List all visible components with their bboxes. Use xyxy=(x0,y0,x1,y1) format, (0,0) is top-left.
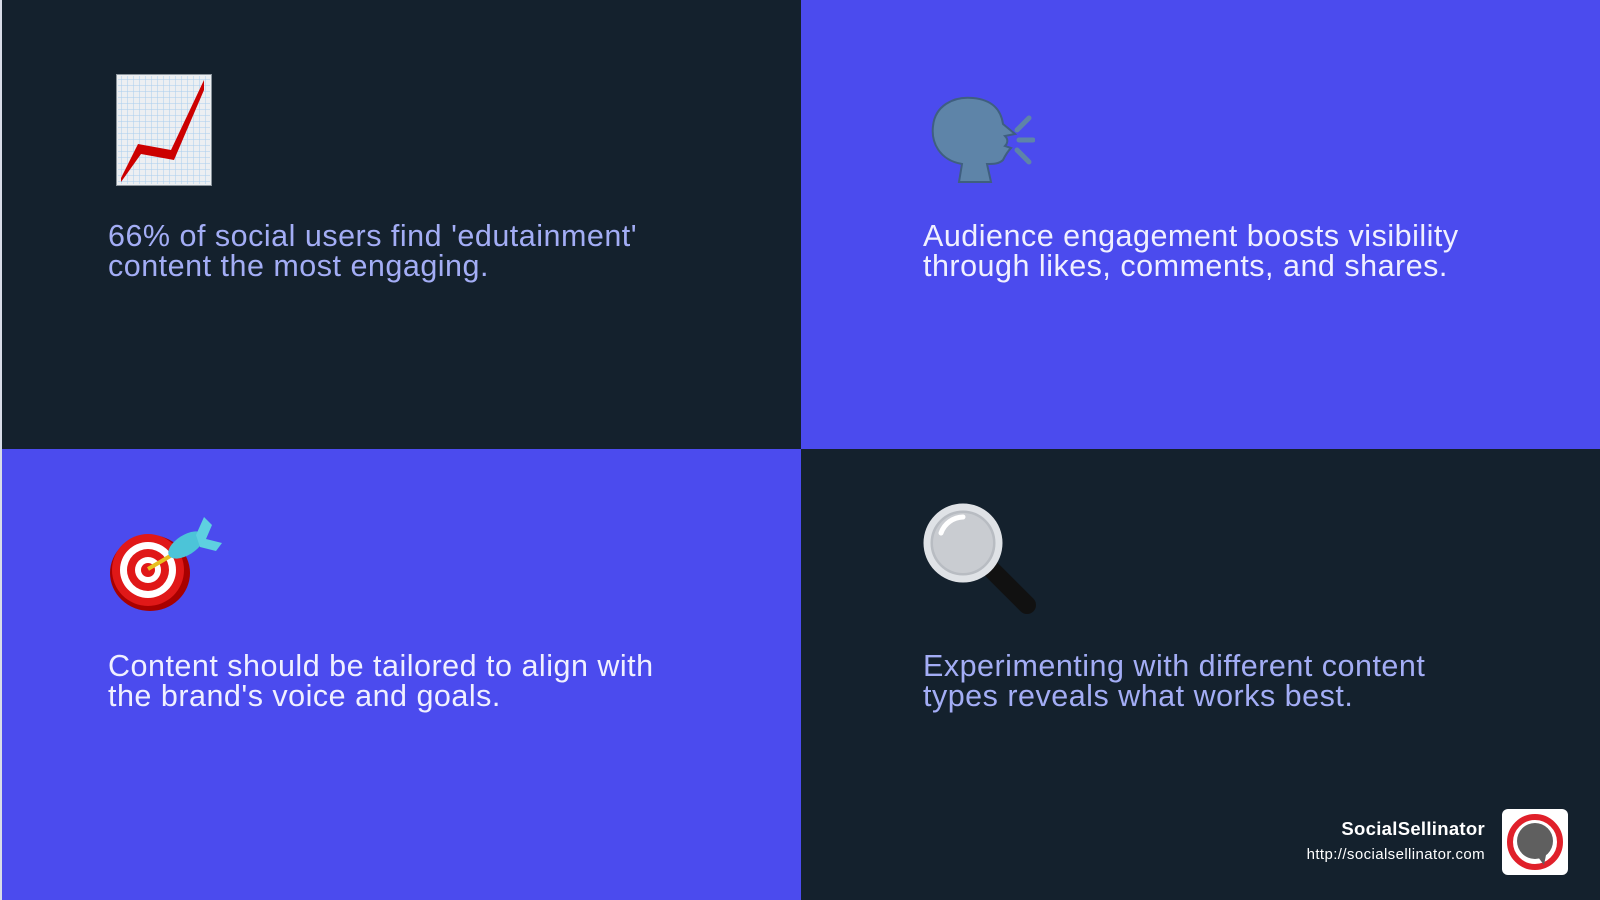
panel: experimenting xyxy=(801,449,1600,900)
icon: chart increasing xyxy=(116,74,212,186)
text: brand voice: the brand's voice and goals. xyxy=(108,679,501,713)
brand name: SocialSellinator xyxy=(1341,818,1485,839)
text: edutainment: 66% of social users find 'edutainment' xyxy=(108,219,637,253)
text: engagement xyxy=(923,219,1459,283)
brand block xyxy=(1307,809,1568,875)
icon: direct hit xyxy=(110,517,222,611)
decorative left strip xyxy=(0,0,2,900)
text: engagement: through likes, comments, and shares. xyxy=(923,249,1448,283)
panel: brand voice xyxy=(0,449,801,900)
icon: speaking head xyxy=(932,96,1035,183)
panel: edutainment stat xyxy=(0,0,801,449)
text: engagement: Audience engagement boosts visibility xyxy=(923,219,1459,253)
text: experimenting: types reveals what works best. xyxy=(923,679,1353,713)
logo xyxy=(1502,809,1568,875)
text: brand voice: Content should be tailored to align with xyxy=(108,649,654,683)
text: brand voice xyxy=(108,649,654,713)
text: edutainment xyxy=(108,219,637,283)
icon: magnifying glass xyxy=(924,504,1036,614)
text: experimenting xyxy=(923,649,1425,713)
brand url: http://socialsellinator.com xyxy=(1307,846,1485,863)
text: edutainment: content the most engaging. xyxy=(108,249,489,283)
text: experimenting: Experimenting with different content xyxy=(923,649,1425,683)
panel: audience engagement xyxy=(801,0,1600,449)
